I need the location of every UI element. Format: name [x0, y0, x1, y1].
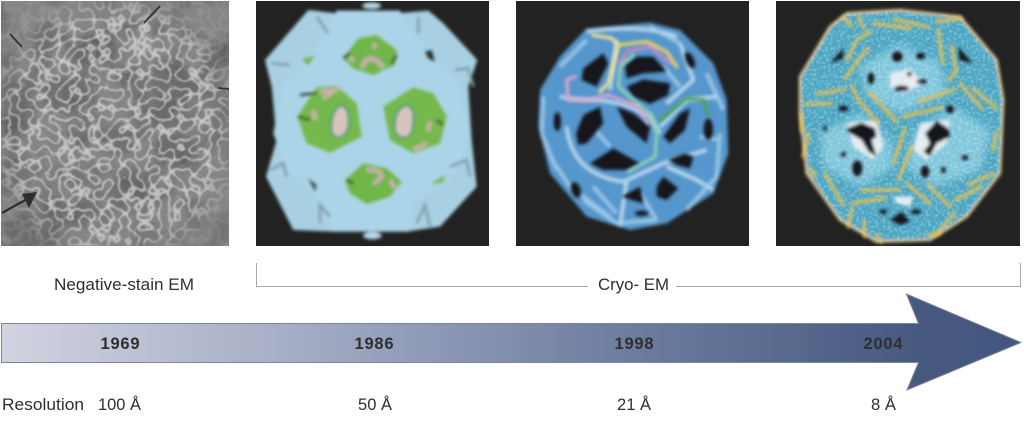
value: 8 angstrom: 8 Å — [871, 395, 897, 414]
speckled density texture — [800, 10, 1004, 242]
value: 21 angstrom: 21 Å — [617, 395, 652, 414]
panel: 1998 cryo-EM reconstruction — [516, 1, 749, 246]
year 2004: 2004 — [864, 335, 903, 353]
panel: 1986 cryo-EM reconstruction — [256, 1, 489, 246]
tick marks — [10, 6, 229, 89]
dark openings with white cores — [823, 47, 973, 225]
dark stain pockets — [0, 33, 195, 242]
resolution row label: Resolution — [2, 395, 84, 414]
green openings with pink cores — [297, 35, 447, 204]
yellow heavy-chain rods — [802, 17, 997, 242]
arrow: large pointer — [2, 199, 27, 213]
small side openings — [302, 50, 445, 192]
year 1998: 1998 — [614, 335, 654, 353]
panel: 2004 cryo-EM reconstruction — [776, 1, 1020, 246]
value: 100 angstrom: 100 Å — [98, 395, 142, 414]
value: 50 angstrom: 50 Å — [358, 395, 393, 414]
label: negative-stain EM: Negative-stain EM — [54, 275, 194, 294]
cage body — [538, 23, 728, 230]
year 1969: 1969 — [100, 335, 140, 353]
timeline arrow — [2, 294, 1021, 390]
highlighted trimer legs — [567, 35, 708, 172]
capsid shell — [265, 2, 477, 239]
arrowhead — [22, 192, 37, 208]
bracket: cryo-EM range — [256, 263, 1020, 286]
particle strands — [1, 1, 229, 246]
year 1986: 1986 — [354, 335, 394, 353]
capsid density — [800, 10, 1003, 242]
label: cryo-EM: Cryo- EM — [598, 275, 669, 294]
dark openings — [554, 50, 713, 216]
panel: negative-stain EM micrograph — [0, 1, 229, 246]
